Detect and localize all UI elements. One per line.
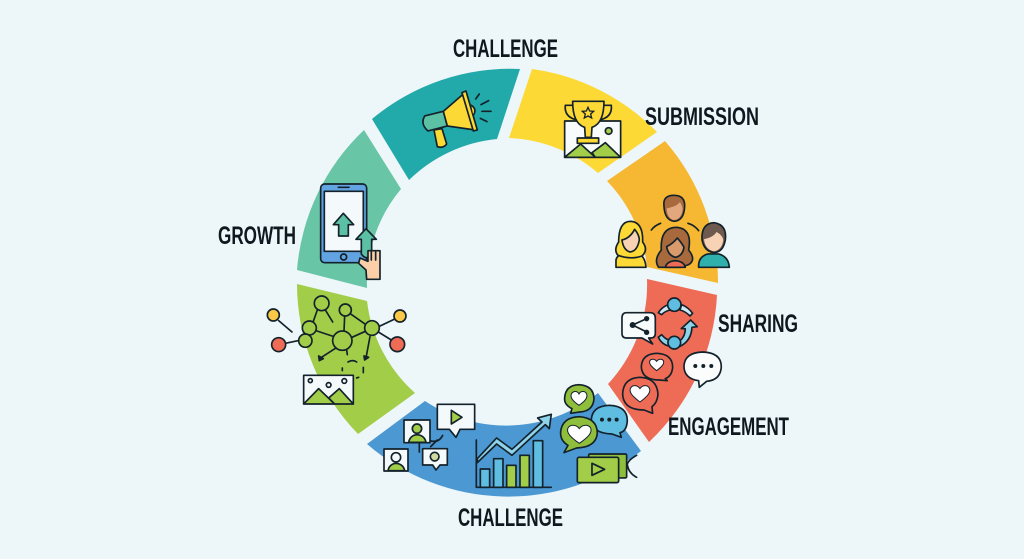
icon: network diagram with picture bbox=[267, 296, 406, 404]
ring segment: submission (yellow) bbox=[509, 69, 657, 173]
icon: rising bar chart bbox=[476, 414, 551, 487]
icon: megaphone bbox=[423, 91, 491, 147]
icon: heart and speech bubbles bbox=[623, 352, 721, 413]
ring segment: community (orange) bbox=[607, 141, 718, 283]
ring segment: growth (mint) bbox=[297, 130, 401, 288]
ring segment: network (green) bbox=[297, 284, 415, 434]
heading: growth: GROWTH bbox=[218, 222, 296, 250]
icon: trophy and picture bbox=[565, 101, 621, 157]
icon: chat bubbles and video camera bbox=[561, 385, 637, 483]
ring segment: challenge (teal) bbox=[372, 69, 520, 180]
heading: engagement: ENGAGEMENT bbox=[668, 413, 789, 441]
ring segment: results (blue) bbox=[367, 393, 641, 497]
icon: phone with growth arrow and hand bbox=[321, 184, 380, 279]
icon: share bubble and cycle bbox=[622, 298, 697, 349]
heading: challenge bottom: CHALLENGE bbox=[458, 504, 563, 532]
heading: submission: SUBMISSION bbox=[645, 103, 759, 131]
ring segment: sharing and engagement (red) bbox=[608, 279, 717, 442]
heading: sharing: SHARING bbox=[718, 310, 798, 338]
icon: group of people bbox=[616, 195, 729, 267]
icon: people and video bubbles bbox=[384, 404, 475, 471]
heading: challenge top: CHALLENGE bbox=[453, 35, 558, 63]
